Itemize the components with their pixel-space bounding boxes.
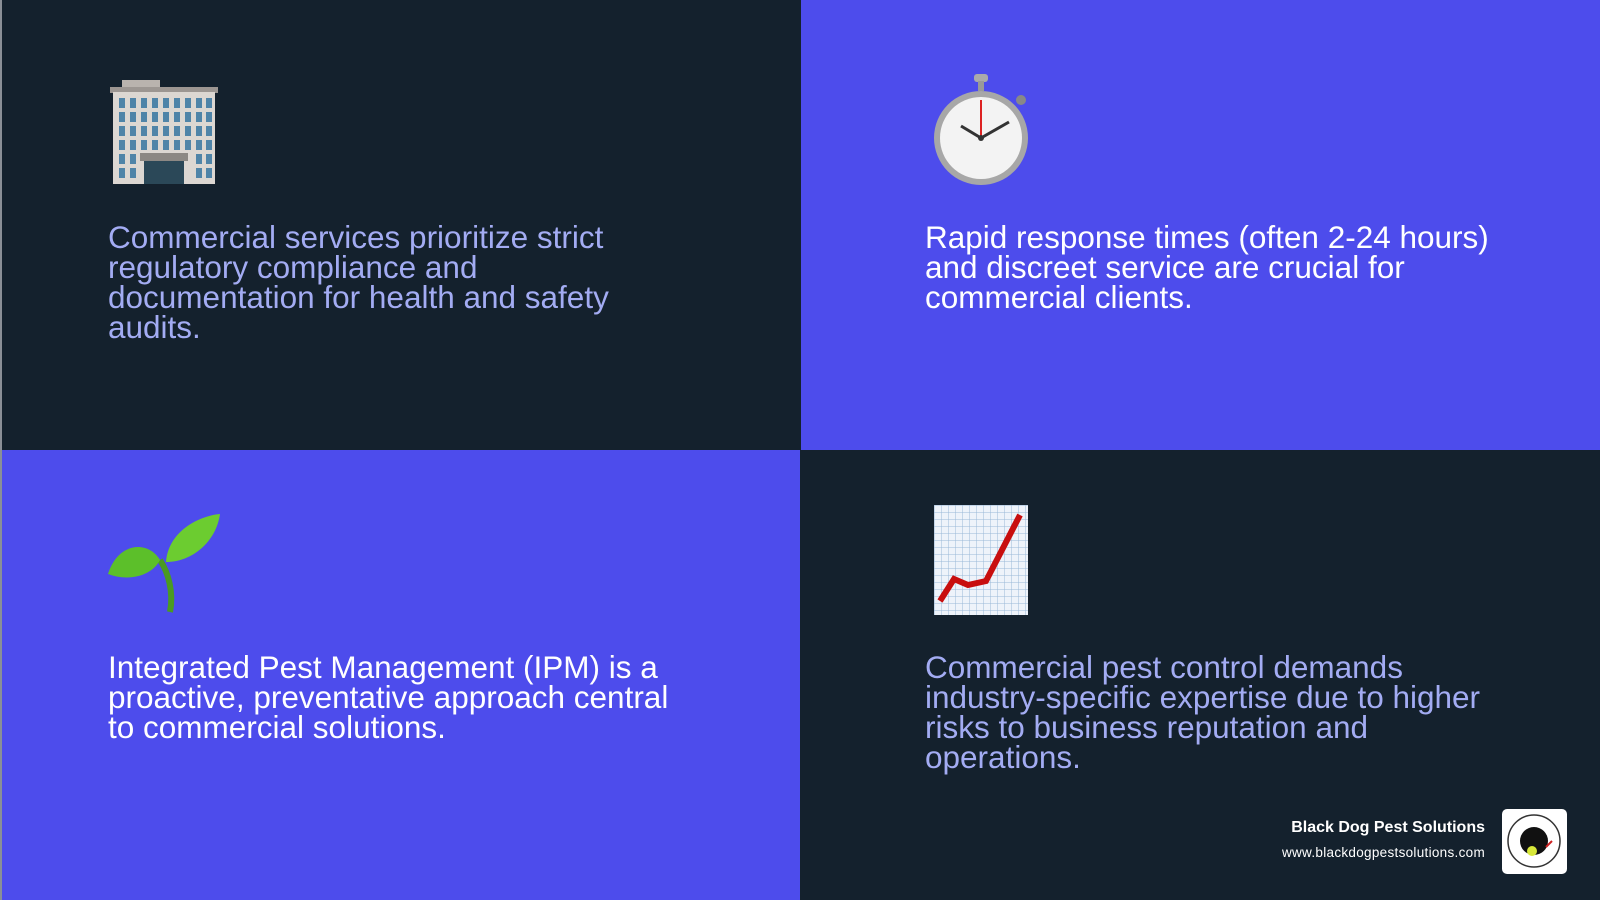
icon: seedling — [108, 514, 220, 613]
text: compliance: audits. — [108, 309, 201, 345]
logo — [1502, 809, 1567, 874]
text: compliance: regulatory compliance and — [108, 249, 477, 285]
panel: response times — [801, 0, 1600, 450]
icon: chart — [934, 505, 1028, 615]
text: compliance — [108, 219, 609, 345]
text: expertise: operations. — [925, 739, 1081, 775]
text: IPM — [108, 649, 668, 745]
panel: expertise — [801, 450, 1600, 900]
text: compliance: Commercial services prioritize strict — [108, 219, 603, 255]
panel: compliance — [0, 0, 800, 450]
brand name: Black Dog Pest Solutions — [1291, 819, 1485, 836]
text: response times: and discreet service are crucial for — [925, 249, 1405, 285]
icon: office building — [110, 80, 218, 184]
text: response times — [925, 219, 1489, 315]
text: IPM: proactive, preventative approach central — [108, 679, 668, 715]
brand url: www.blackdogpestsolutions.com — [1282, 845, 1485, 860]
text: expertise: risks to business reputation and — [925, 709, 1368, 745]
text: response times: commercial clients. — [925, 279, 1193, 315]
text: IPM: Integrated Pest Management (IPM) is a — [108, 649, 658, 685]
icon: stopwatch — [934, 74, 1028, 185]
text: expertise — [925, 649, 1480, 775]
footer: brand — [1282, 809, 1567, 874]
panel: IPM — [0, 450, 800, 900]
text: expertise: industry-specific expertise due to higher — [925, 679, 1480, 715]
text: IPM: to commercial solutions. — [108, 709, 446, 745]
text: response times: Rapid response times (often 2-24 hours) — [925, 219, 1489, 255]
text: compliance: documentation for health and safety — [108, 279, 609, 315]
text: expertise: Commercial pest control demands — [925, 649, 1403, 685]
